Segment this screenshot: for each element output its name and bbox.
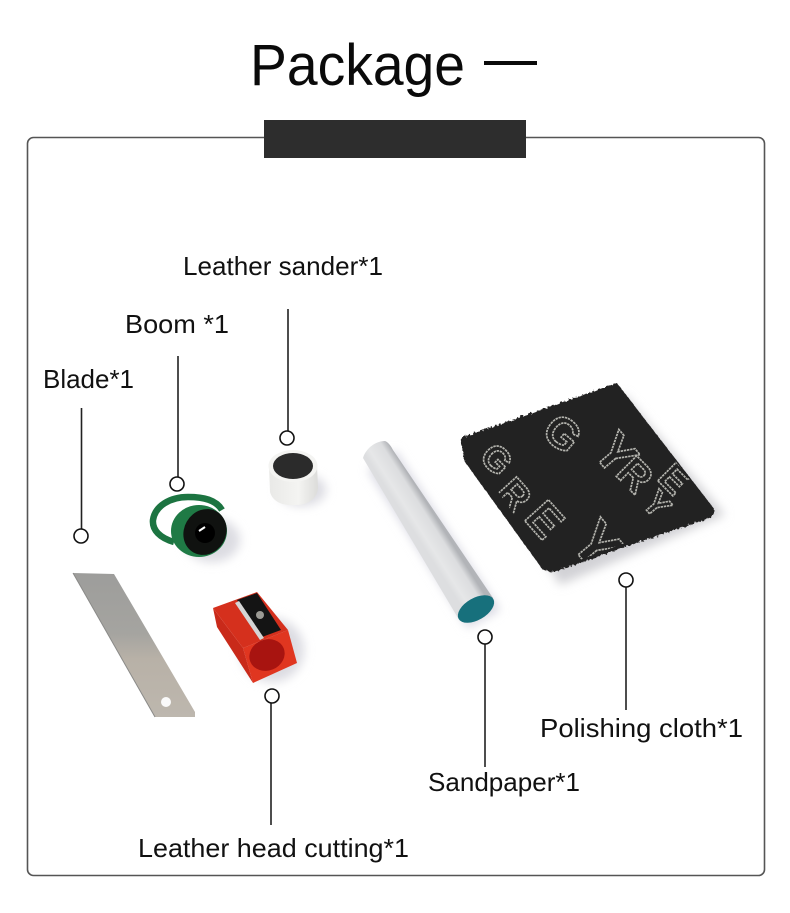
icon: sandpaper roll — [363, 441, 500, 629]
callout: leather sander: Leather sander*1 — [183, 251, 383, 281]
icon: polishing cloth: E — [650, 456, 697, 503]
icon: polishing cloth: Y — [582, 422, 648, 486]
panel: package contents frame — [28, 138, 764, 876]
icon: leather sander — [268, 450, 326, 506]
icon: polishing cloth: R — [608, 447, 663, 502]
icon: polishing cloth: G — [533, 404, 591, 464]
callout: leather head cutting: Leather head cutting*1 — [138, 833, 409, 863]
callout: boom — [125, 309, 229, 491]
icon: polishing cloth: E — [515, 490, 574, 548]
callout: blade: Blade*1 — [43, 364, 134, 394]
icon: polishing cloth: G — [472, 435, 521, 484]
callout: sandpaper: Sandpaper*1 — [428, 767, 580, 797]
callout: leather sander — [183, 251, 383, 445]
icon: polishing cloth: R — [488, 470, 540, 521]
header bar — [264, 120, 526, 158]
callout: leather head cutting — [138, 689, 409, 863]
callout: polishing cloth — [540, 573, 743, 743]
title: Package — [250, 33, 465, 98]
icon: polishing cloth — [460, 383, 725, 585]
callout: sandpaper — [428, 630, 580, 797]
callout: blade — [43, 364, 134, 543]
callout: boom: Boom *1 — [125, 309, 229, 339]
callout: polishing cloth: Polishing cloth*1 — [540, 713, 743, 743]
icon: polishing cloth: Y — [558, 508, 635, 582]
icon: leather head cutter — [213, 592, 304, 683]
icon: boom ring — [153, 497, 240, 563]
icon: blade — [73, 573, 195, 717]
icon: polishing cloth: Y — [635, 484, 678, 526]
